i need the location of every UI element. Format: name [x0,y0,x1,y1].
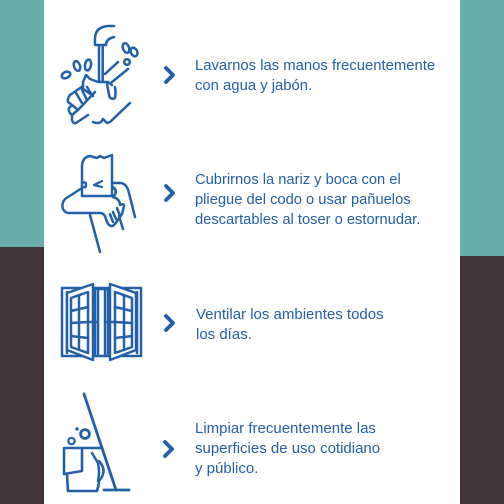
text: hand washing [195,58,435,94]
text: clean surfaces: y público. [195,460,258,477]
text: clean surfaces: Limpiar frecuentemente las [195,420,376,437]
text: hand washing: con agua y jabón. [195,78,312,94]
arrow 4 [165,442,172,456]
right teal band [460,0,504,256]
text: ventilate [196,306,384,343]
icon: mop and bucket [64,394,129,491]
text: cover nose and mouth: pliegue del codo o usar pañuelos [195,192,411,208]
text: cover nose and mouth: descartables al toser o estornudar. [195,212,420,228]
arrow 3 [166,316,173,330]
left dark band [0,247,44,504]
left teal band [0,0,44,247]
arrow 2 [166,186,173,200]
text: hand washing: Lavarnos las manos frecuentemente [195,58,435,74]
text: clean surfaces [195,420,380,477]
text: cover nose and mouth: Cubrirnos la nariz y boca con el [195,172,401,188]
text: cover nose and mouth [195,172,420,228]
arrow 1 [166,68,173,82]
icon: sneezing into elbow [62,155,135,252]
text: clean surfaces: superficies de uso cotidiano [195,440,380,457]
icon: open window [62,284,141,360]
text: ventilate: Ventilar los ambientes todos [196,306,384,323]
right dark band [460,256,504,504]
text: ventilate: los días. [196,326,252,343]
icon: hand washing [61,26,139,123]
